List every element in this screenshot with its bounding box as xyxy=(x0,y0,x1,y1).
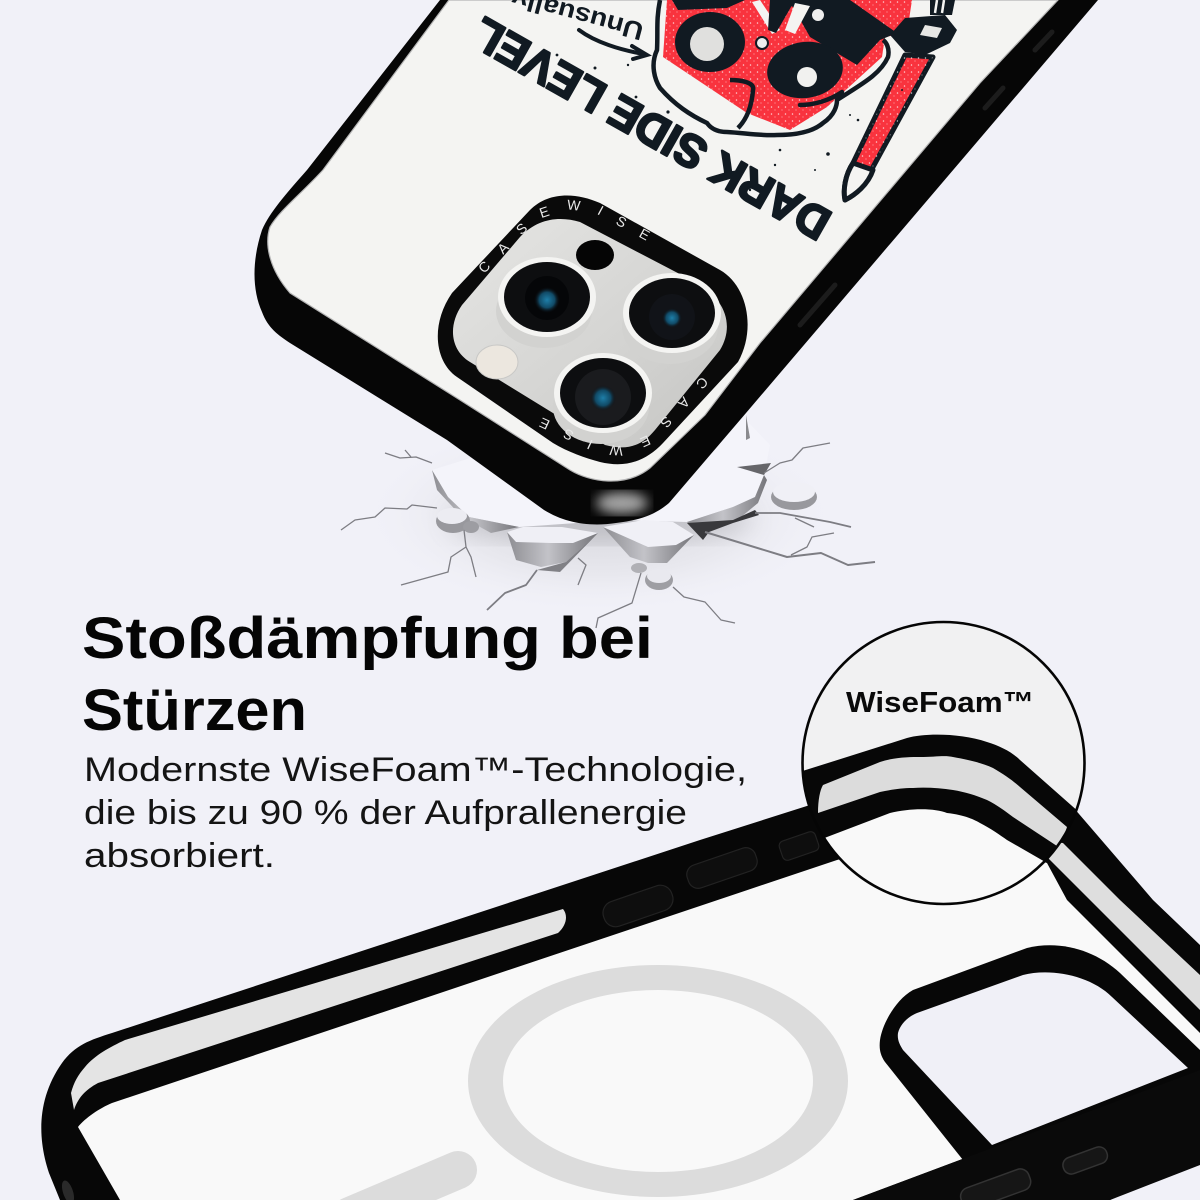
white phone back xyxy=(268,0,1058,481)
cracked floor impact xyxy=(341,415,875,628)
heading: Stürzen xyxy=(82,678,307,743)
clear back xyxy=(78,830,1200,1200)
black case rim xyxy=(254,0,1098,524)
camera island bumper xyxy=(438,196,748,464)
lens: bottom xyxy=(553,353,652,444)
left foam slot xyxy=(71,909,566,1110)
lidar sensor xyxy=(576,240,614,270)
body text: absorbiert. xyxy=(84,837,275,875)
body text xyxy=(84,751,747,875)
right foam slot xyxy=(1030,840,1200,1010)
case side buttons xyxy=(800,32,1052,325)
body text: Modernste WiseFoam™-Technologie, xyxy=(84,751,747,789)
CASEWISE engraving bottom: CASEWISE xyxy=(539,378,707,456)
rim highlight xyxy=(596,492,648,514)
bottom band xyxy=(853,1070,1200,1200)
ink specks xyxy=(556,54,903,191)
side buttons xyxy=(600,830,820,930)
black frame xyxy=(41,735,1200,1200)
flash xyxy=(476,345,518,379)
arrow xyxy=(579,30,647,59)
lens: upper left xyxy=(496,257,596,348)
printed artwork xyxy=(463,0,957,251)
heading xyxy=(82,606,653,743)
callout label: WiseFoam™ xyxy=(846,687,1034,719)
callout: WiseFoam magnifier xyxy=(801,620,1086,906)
body text: die bis zu 90 % der Aufprallenergie xyxy=(84,794,687,832)
mascot face xyxy=(654,0,912,135)
left port xyxy=(60,1179,76,1200)
slogan: DARK SIDE LEVEL: DARK SIDE LEVEL xyxy=(463,7,839,251)
heading: Stoßdämpfung bei xyxy=(82,606,653,671)
paint brush xyxy=(844,0,957,200)
bottom open case xyxy=(41,735,1200,1200)
camera cut-out xyxy=(880,945,1200,1160)
charging port cut-outs xyxy=(958,1145,1110,1200)
magnet ring xyxy=(468,965,848,1197)
lens: right xyxy=(622,273,721,364)
silver camera plate xyxy=(453,219,727,447)
CASEWISE engraving top: CASEWISE xyxy=(479,200,650,272)
magnet stem xyxy=(350,1170,458,1200)
top phone in case xyxy=(254,0,1098,524)
